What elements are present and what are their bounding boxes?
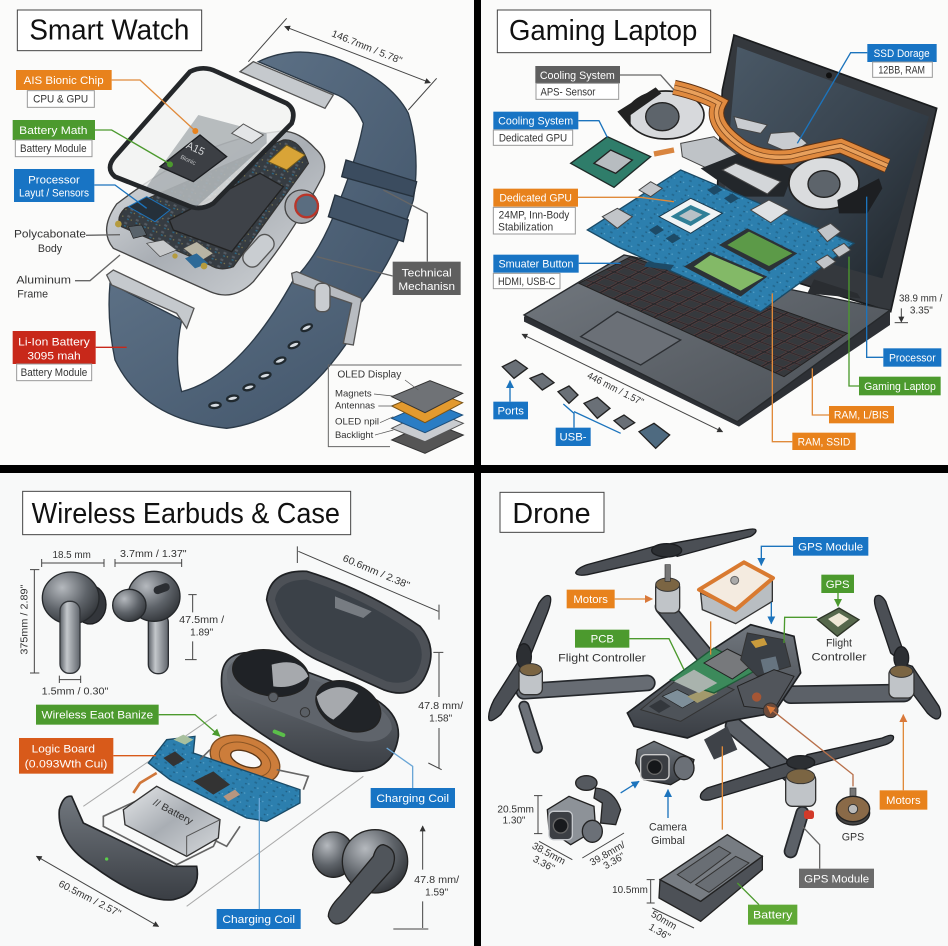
label: Ports <box>493 402 528 419</box>
dimension: gimbal measures <box>497 796 628 875</box>
arrow: gray module leader <box>802 826 820 869</box>
dimension: case measures: 60.6mm / 2.38" <box>341 553 412 592</box>
illustration: watch glass and chip <box>110 68 293 208</box>
illustration: watch glass and chip: Bionic <box>179 155 196 167</box>
dimension: battery measures: 50mm <box>649 909 678 933</box>
dimension: earbud measures: 3.7mm / 1.37" <box>120 549 187 560</box>
arrow: GPU chip leader <box>578 121 607 137</box>
arrow: motors right leader <box>901 715 905 790</box>
dimension: laptop width: 446 mm / 1.57" <box>585 371 645 409</box>
label: Charging Coil (board) <box>217 909 301 929</box>
title: Drone: Drone <box>512 498 591 530</box>
illustration: battery and wires: // Battery <box>151 797 195 827</box>
illustration: loose earbud <box>313 830 408 924</box>
label: USB: USB- <box>559 432 587 444</box>
label: Aluminum Frame <box>16 255 120 301</box>
label: GPS small motor: GPS <box>842 831 864 843</box>
arrow: button leader <box>579 261 621 265</box>
label: Technical Mechanism: Technical <box>402 268 452 280</box>
label: Processor: Layut / Sensors <box>19 188 89 200</box>
label: A15 Bionic Chip: AIS Bionic Chip <box>24 75 104 87</box>
label: Polycarbonate Body: Polycabonate <box>14 229 86 241</box>
dimension: earbud measures: 1.5mm / 0.30" <box>42 687 109 698</box>
illustration: drone motors <box>519 565 914 819</box>
dimension: strap length <box>248 18 437 110</box>
panel: smart watch <box>0 0 474 465</box>
title: Drone <box>500 492 604 532</box>
dimension: case measures <box>37 546 463 929</box>
dimension: gimbal measures: 3.36" <box>602 851 628 872</box>
arrow: gaming laptop leader <box>849 257 859 386</box>
illustration: ports row <box>502 360 670 448</box>
label: Camera Gimbal: Gimbal <box>651 835 685 847</box>
label: Cooling System (sensor) <box>535 66 620 99</box>
label: Li-Ion Battery <box>13 331 96 381</box>
inset: display layers: OLED Display <box>337 369 401 380</box>
dimension: earbud measures: 47.5mm / <box>179 615 224 626</box>
dimension: battery measures: 10.5mm <box>612 885 648 896</box>
label: Logic Board <box>19 738 113 774</box>
label: Polycarbonate Body: Body <box>38 243 63 255</box>
label: Aluminum Frame: Frame <box>17 289 48 301</box>
arrow: ports leader <box>508 381 512 402</box>
title: Gaming Laptop <box>497 10 711 53</box>
label: Battery: Battery <box>753 910 793 922</box>
arrow: GPS module leader <box>761 546 793 565</box>
label: Flight Controller right: Controller <box>811 651 867 663</box>
label: A15 Bionic Chip: CPU & GPU <box>33 94 88 106</box>
illustration: watch glass and chip: A15 <box>184 140 206 158</box>
label: GPS Module gray <box>799 869 874 888</box>
label: PCB Flight Controller: PCB <box>591 634 614 646</box>
label: Camera Gimbal: Camera <box>649 821 687 833</box>
label: GPS Module top: GPS Module <box>798 541 863 553</box>
panel: wireless earbuds and case <box>0 473 474 946</box>
arrow: charging coil leader case <box>387 748 413 788</box>
label: Cooling System (sensor): Cooling System <box>540 70 615 82</box>
illustration: watch band <box>107 52 417 428</box>
illustration: laptop lid and screen <box>714 35 937 312</box>
label: SSD Storage: 12BB, RAM <box>878 64 925 76</box>
illustration: cooling fans and heat sinks <box>617 87 887 213</box>
dimension: laptop thickness <box>895 294 943 323</box>
illustration: GPS chip <box>817 608 859 636</box>
illustration: battery and wires <box>103 750 308 865</box>
arrow: cooling leader <box>620 75 674 90</box>
label: SSD Storage: SSD Dorage <box>874 48 930 60</box>
panel: drone <box>481 473 948 946</box>
label: Gaming Laptop <box>859 377 941 395</box>
label: Gaming Laptop: Gaming Laptop <box>864 381 936 393</box>
label: Li-Ion Battery: Li-Ion Battery <box>18 336 90 348</box>
dimension guide lines <box>83 715 363 906</box>
label: Wireless Earbud Banner: Wireless Eaot Banize <box>41 710 153 722</box>
label: SSD Storage <box>867 44 937 77</box>
label: GPS Module top <box>793 537 868 556</box>
label: Dedicated GPU: 24MP, Inn-Body <box>499 209 570 221</box>
dimension: case measures: 1.58" <box>429 713 453 724</box>
arrow: top board leader <box>709 621 713 655</box>
label: Processor: Processor <box>889 353 936 365</box>
illustration: main camera <box>636 741 694 785</box>
arrow: flight chip leader <box>784 617 817 643</box>
arrow: USB leader <box>563 404 621 433</box>
label: Motors top: Motors <box>573 594 608 606</box>
dimension: gimbal measures: 20.5mm <box>497 804 534 815</box>
arrow: chip leader <box>112 80 198 134</box>
label: Battery <box>748 905 797 925</box>
inset: display layers: Backlight <box>335 430 374 440</box>
label: Li-Ion Battery: 3095 mah <box>27 350 81 362</box>
dimension: case measures: 47.8 mm/ <box>418 701 463 712</box>
label: USB <box>556 428 591 446</box>
label: Li-Ion Battery: Battery Module <box>21 367 87 379</box>
arrow: camera gimbal up <box>666 790 670 818</box>
label: RAM, SSID <box>792 433 856 450</box>
inset: display layers <box>328 365 463 453</box>
arrow: RAM SSID leader <box>772 293 792 442</box>
label: Wireless Earbud Banner <box>36 705 159 725</box>
dimension: case measures: 47.8 mm/ <box>414 875 459 886</box>
illustration: GPU chip <box>571 137 651 187</box>
arrow: small motor leader <box>767 706 853 786</box>
label: Aluminum Frame: Aluminum <box>16 275 71 287</box>
arrow: PCB leader <box>629 639 684 670</box>
inset: display layers: Magnets <box>335 389 372 399</box>
label: Charging Coil (case): Charging Coil <box>376 793 449 805</box>
illustration: small motor <box>836 788 870 825</box>
label: Charging Coil (board): Charging Coil <box>222 914 295 926</box>
dimension: earbud measures: 375mm / 2.89" <box>19 584 30 655</box>
label: Battery Math <box>13 120 95 157</box>
label: GPS chip: GPS <box>826 579 850 591</box>
arrow: dedicated GPU leader <box>578 197 674 202</box>
arrow: RAM L/BIS leader <box>812 368 829 415</box>
label: Charging Coil (case) <box>371 788 455 808</box>
label: RAM, L/BIS: RAM, L/BIS <box>834 410 889 422</box>
illustration: logic board <box>148 735 300 821</box>
dimension: battery measures <box>612 880 694 943</box>
label: Processor: Processor <box>28 175 80 187</box>
label: GPS Module gray: GPS Module <box>804 873 869 885</box>
dimension: laptop thickness: 3.35" <box>910 305 933 316</box>
dimension: case measures: 1.59" <box>425 888 449 899</box>
label: Cooling System (GPU): Cooling System <box>498 116 573 128</box>
arrow: motors top leader <box>615 597 652 601</box>
title: Smart Watch: Smart Watch <box>29 14 189 46</box>
title: Gaming Laptop: Gaming Laptop <box>509 15 697 47</box>
label: Technical Mechanism: Mechanisn <box>398 281 455 293</box>
title: Wireless Earbuds & Case: Wireless Earbuds & Case <box>32 498 340 530</box>
label: Motors top <box>567 590 615 608</box>
panel: gaming laptop <box>481 0 948 465</box>
dimension: earbud measures: 18.5 mm <box>52 550 91 561</box>
arrow: SSD leader <box>797 53 867 143</box>
dimension: earbud measures <box>19 549 224 698</box>
label: Battery Math: Battery Math <box>19 125 87 137</box>
arrow: GPS chip leader <box>836 593 840 606</box>
arrow: battery leader <box>737 883 759 905</box>
illustration: motherboard <box>587 170 854 312</box>
dimension: earbud measures: 1.89" <box>190 628 214 639</box>
label: Motors right <box>880 790 927 810</box>
label: Flight Controller right <box>811 637 867 663</box>
label: Flight Controller right: Flight <box>826 637 852 649</box>
arrow: processor leader <box>867 197 883 357</box>
illustration: drone propellers <box>489 529 941 800</box>
arrow: logic board leader <box>113 754 156 758</box>
dimension: laptop width <box>522 334 722 432</box>
label: Dedicated GPU <box>493 189 578 234</box>
label: Processor <box>883 348 941 367</box>
label: Polycarbonate Body <box>14 229 120 255</box>
inset: display layers: Antennas <box>335 401 375 411</box>
label: Smuater Button: HDMI, USB-C <box>498 276 556 288</box>
label: Smuater Button <box>493 255 579 289</box>
illustration: watch case <box>107 131 325 295</box>
label: Camera Gimbal <box>649 821 687 847</box>
dimension: strap length: 146.7mm / 5.78" <box>330 29 404 67</box>
label: Logic Board: Logic Board <box>32 743 95 755</box>
label: Technical Mechanism <box>393 262 461 295</box>
arrow: battery leader <box>95 130 173 167</box>
label: RAM, SSID: RAM, SSID <box>798 436 850 448</box>
label: Cooling System (GPU): Dedicated GPU <box>499 132 567 144</box>
label: RAM, L/BIS <box>829 406 894 423</box>
label: Smuater Button: Smuater Button <box>498 259 573 271</box>
dimension: gimbal measures: 1.30" <box>503 816 526 827</box>
label: GPS chip <box>821 575 854 593</box>
arrow: processor leader <box>94 185 147 208</box>
illustration: GPS module box <box>699 562 773 624</box>
label: Ports: Ports <box>497 406 524 418</box>
illustration: drone arms <box>524 606 904 851</box>
dimension: gimbal measures: 3.36" <box>531 854 557 875</box>
illustration: laptop base and keyboard <box>524 255 890 427</box>
dimension: laptop thickness: 38.9 mm / <box>899 294 943 305</box>
arrow: coil leader <box>159 715 220 736</box>
illustration: case bottom shell <box>59 796 197 900</box>
arrow: gimbal to camera <box>621 781 639 793</box>
label: PCB Flight Controller <box>558 630 646 664</box>
label: Cooling System (sensor): APS- Sensor <box>540 86 596 98</box>
label: A15 Bionic Chip <box>16 70 112 107</box>
label: Motors right: Motors <box>886 795 921 807</box>
label: Logic Board: (0.093Wth Cui) <box>25 759 108 771</box>
arrow: GPS to body <box>769 602 773 624</box>
dimension: battery measures: 1.36" <box>647 922 672 943</box>
label: Dedicated GPU: Dedicated GPU <box>499 193 572 205</box>
label: Dedicated GPU: Stabilization <box>498 221 553 233</box>
arrow: mechanism leader <box>317 190 427 276</box>
illustration: charging case <box>221 571 431 771</box>
arrow: charging coil leader board <box>257 798 261 909</box>
dimension: gimbal measures: 38.5mm <box>530 841 567 867</box>
inset: display layers: OLED npil <box>335 417 379 427</box>
label: Battery Math: Battery Module <box>20 143 87 155</box>
illustration: drone body <box>627 625 801 760</box>
dimension: gimbal measures: 39.8mm/ <box>588 840 628 869</box>
illustration: flight battery <box>659 835 762 921</box>
label: Cooling System (GPU) <box>493 112 578 145</box>
illustration: earbud front <box>42 572 106 673</box>
arrow: battery to body <box>720 746 724 830</box>
dimension: case measures: 60.5mm / 2.57" <box>57 879 123 920</box>
illustration: charging coil <box>203 726 287 793</box>
arrow: battery strap leader <box>96 345 127 349</box>
label: Processor <box>14 169 94 202</box>
illustration: gimbal camera <box>547 776 621 845</box>
illustration: earbud side <box>113 571 180 674</box>
label: PCB Flight Controller: Flight Controller <box>558 652 646 664</box>
